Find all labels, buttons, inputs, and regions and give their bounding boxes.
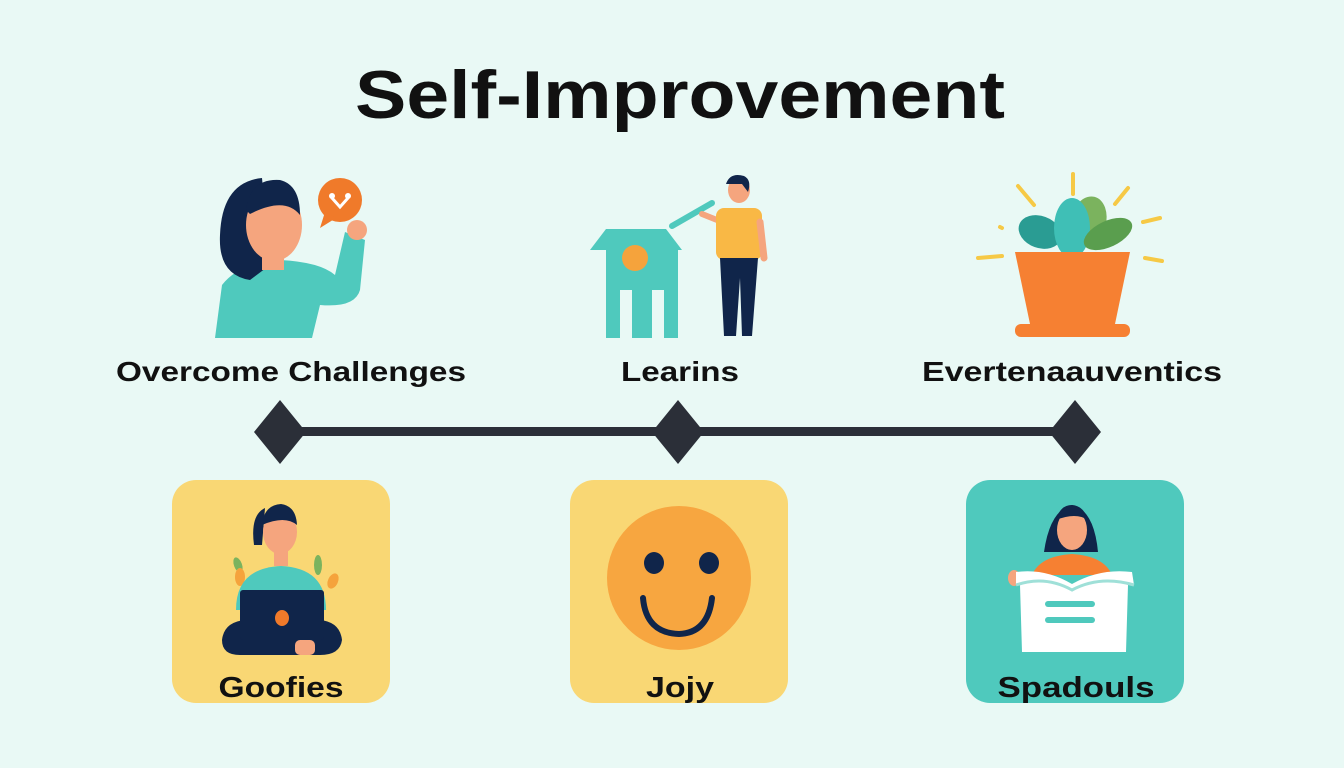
title: Self-Improvement	[355, 57, 1005, 133]
label: Learins: Learins	[621, 356, 739, 387]
card: Goofies: Goofies	[218, 672, 344, 704]
label: Overcome Challenges: Overcome Challenges	[116, 356, 466, 387]
timeline	[254, 400, 1101, 464]
card: Spadouls: Spadouls	[998, 672, 1154, 704]
card: Jojy	[570, 480, 788, 704]
icon: potted plant	[978, 174, 1162, 337]
icon: man painting house	[590, 175, 764, 338]
card: Spadouls	[966, 480, 1184, 704]
label: Evertenaauventics: Evertenaauventics	[922, 356, 1222, 387]
icon: woman with speech bubble	[215, 178, 367, 338]
card: Jojy: Jojy	[646, 672, 714, 704]
card: Goofies	[172, 480, 390, 704]
